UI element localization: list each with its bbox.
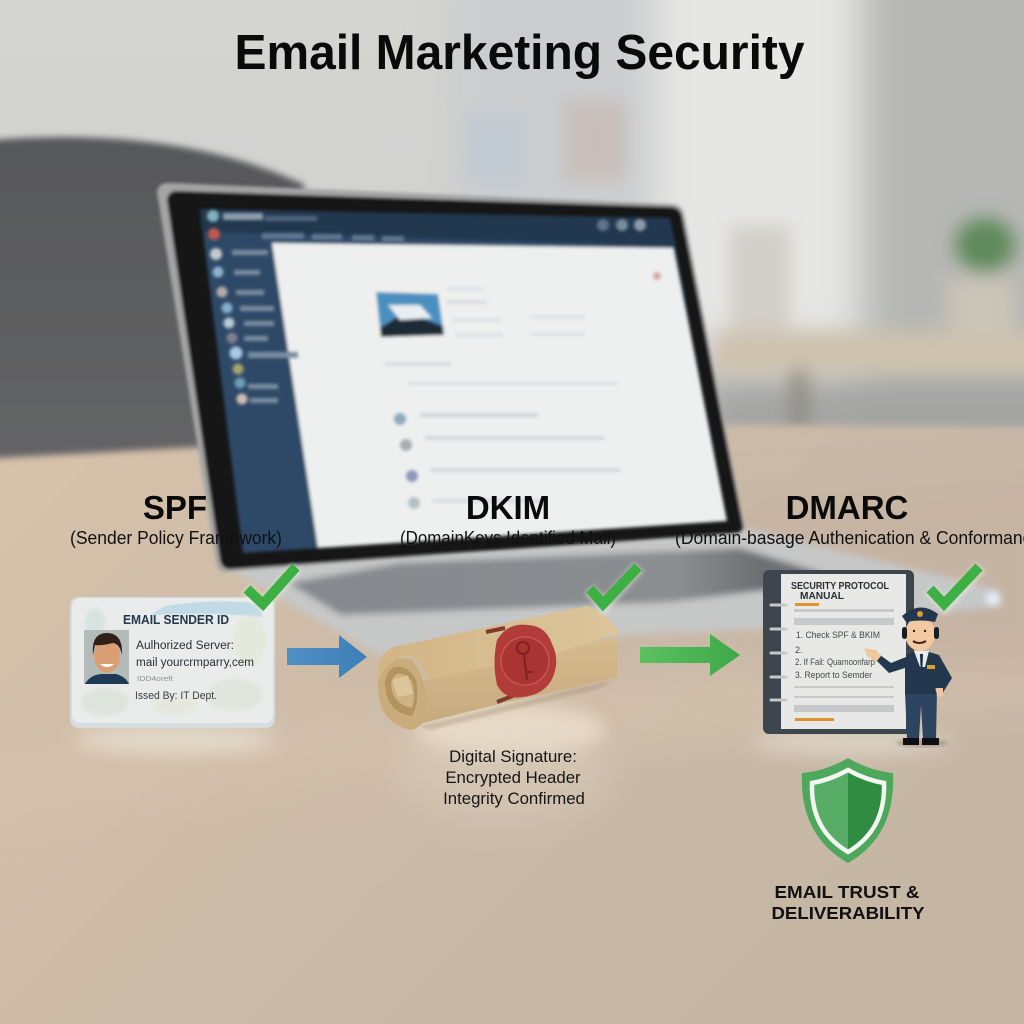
- scroll flap: [377, 606, 620, 680]
- scroll end spiral: [378, 658, 426, 730]
- subheading: SPF: (Sender Policy Framework): [70, 528, 282, 548]
- caption: email trust: EMAIL TRUST &: [774, 882, 920, 902]
- column: DKIM: [377, 489, 639, 808]
- check mark: DKIM: [589, 567, 639, 606]
- DKIM description: Digital Signature:: [449, 747, 577, 766]
- check mark: SPF: [246, 567, 297, 606]
- protocol manual: 1. Check SPF & BKIM: [796, 630, 880, 640]
- security officer: [864, 607, 952, 747]
- column: DMARC: [675, 489, 1024, 923]
- protocol manual: 2.: [795, 645, 803, 655]
- title: Email Marketing Security: [234, 26, 804, 80]
- ID photo: [84, 630, 129, 684]
- card: email sender ID: Aulhorized Server:: [136, 640, 234, 652]
- laptop: [157, 183, 1002, 655]
- card text: EMAIL SENDER ID: [123, 613, 229, 627]
- protocol manual: SECURITY PROTOCOL: [791, 581, 889, 592]
- heading: DMARC: DMARC: [786, 489, 908, 526]
- background: chair: [0, 137, 305, 470]
- caption: email trust: DELIVERABILITY: [772, 903, 925, 923]
- protocol manual: 3. Report to Semder: [795, 670, 872, 680]
- binder rings: [771, 605, 786, 700]
- caption: email trust: [772, 882, 925, 923]
- DKIM description: Integrity Confirmed: [443, 789, 585, 808]
- DKIM description: [443, 747, 585, 808]
- scroll body: [378, 637, 618, 730]
- DKIM description: Encrypted Header: [445, 768, 581, 787]
- email hero image: [376, 292, 444, 337]
- card: email sender ID: [70, 597, 275, 728]
- protocol manual: [763, 570, 914, 734]
- heading: SPF: SPF: [143, 489, 207, 526]
- heading: DKIM: DKIM: [466, 489, 550, 526]
- arrow: DKIM to DMARC: [640, 634, 740, 676]
- column: SPF: [70, 489, 297, 728]
- laptop lid: [157, 183, 745, 572]
- protocol manual: MANUAL: [800, 591, 844, 602]
- protocol manual: 2. If Fail: Quarnoonfarp: [795, 657, 875, 667]
- laptop screen: [200, 209, 727, 553]
- arrow: SPF to DKIM: [287, 635, 367, 678]
- card: email sender ID: IDD4oreft: [137, 674, 174, 683]
- card: email sender ID: Issed By: IT Dept.: [135, 690, 217, 702]
- scroll with wax seal: [377, 606, 620, 730]
- laptop base and keyboard: [218, 528, 1002, 655]
- subheading: DKIM: (DomainKeys Identified Mail): [400, 528, 616, 548]
- icon: shield: [802, 758, 893, 863]
- wax seal: [494, 625, 556, 698]
- background: table surface: [0, 425, 1024, 1024]
- laptop screen contents: [207, 210, 661, 509]
- check mark: DMARC: [929, 567, 981, 606]
- card: email sender ID: mail yourcrmparry,cem: [136, 657, 254, 669]
